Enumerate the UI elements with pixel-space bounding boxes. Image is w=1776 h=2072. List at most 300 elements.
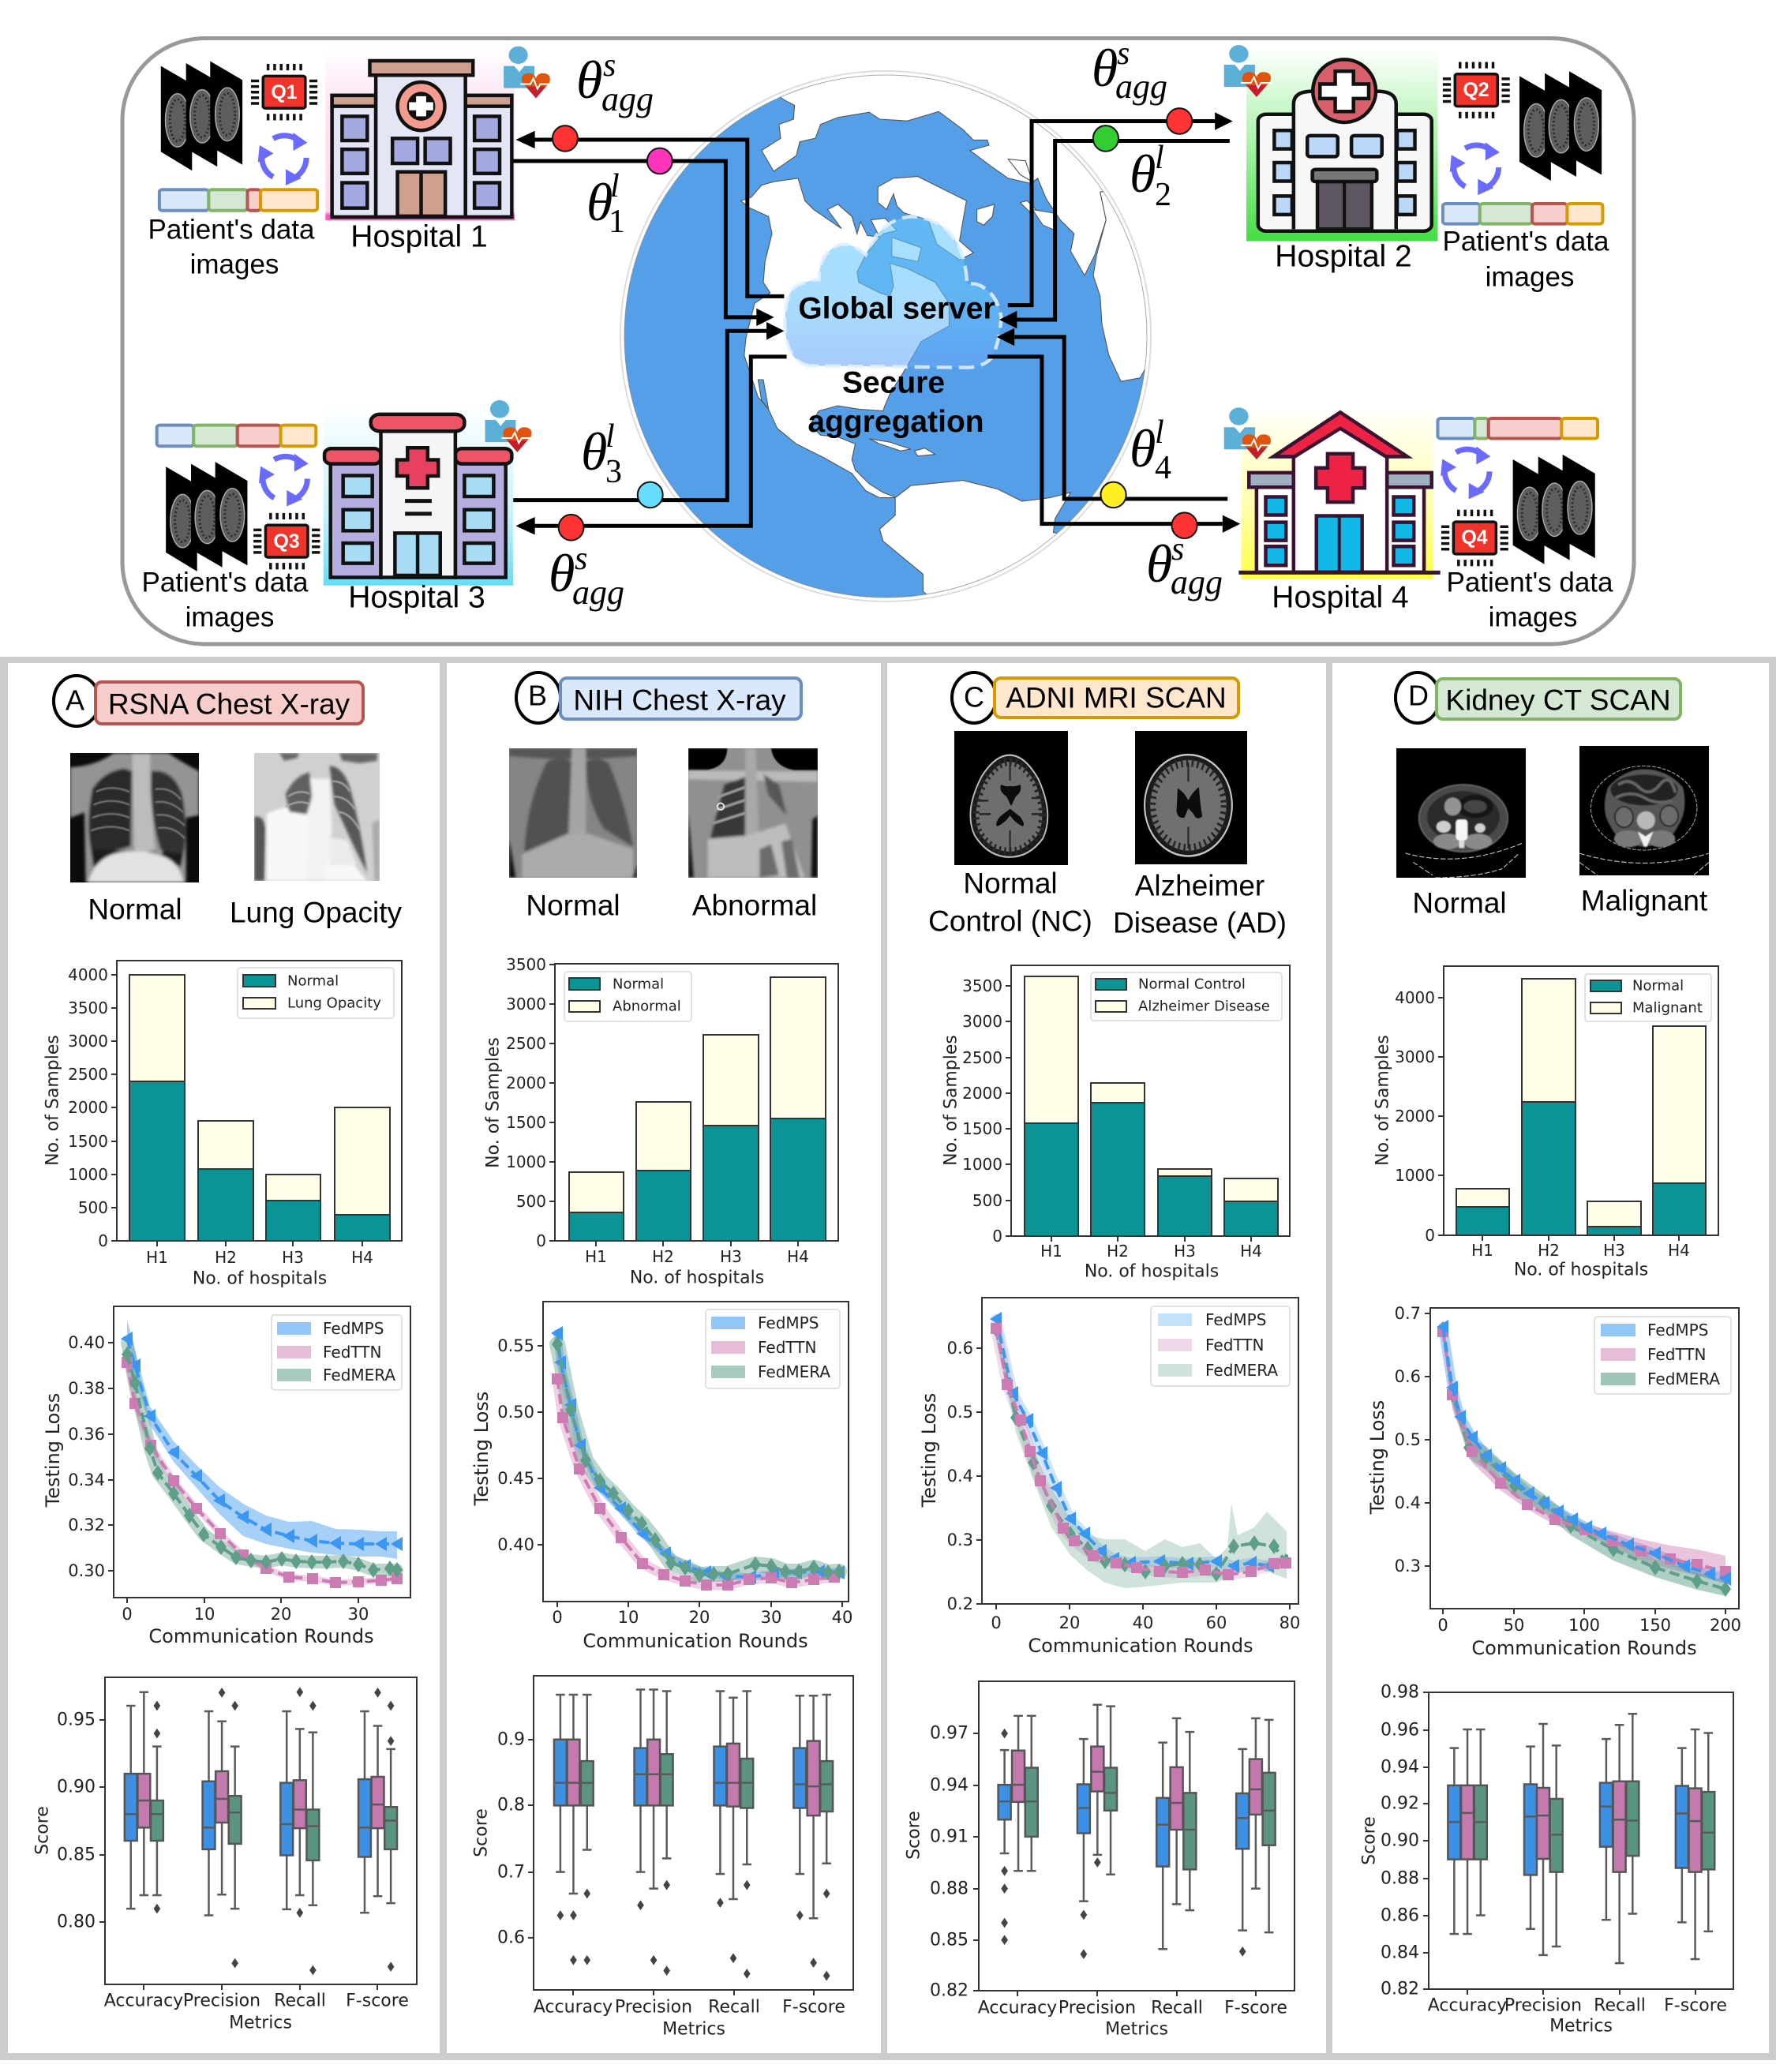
theta symbols: θ [1146,534,1172,594]
label: Normal Control (NC) [928,867,1092,938]
box plot C: 0.91 [930,1827,969,1847]
icon: brain scan stack Q2 [1519,71,1602,181]
patient data captions: Patient's data [142,567,309,598]
line chart C: 0.5 [947,1403,973,1422]
bar chart B: No. of Samples [483,1037,504,1168]
line chart C: 40 [1133,1613,1153,1632]
icon: sync arrows Q3 [252,454,313,511]
icon: brain scan stack Q1 [161,61,242,170]
legend: FedTTN [323,1343,381,1362]
line chart D: 0.6 [1395,1367,1421,1386]
box plot D: Score [1359,1816,1380,1865]
icon: quantum chip Q4 [1441,510,1508,566]
bar chart C: 1000 [962,1155,1002,1174]
legend: FedMPS [1205,1310,1266,1329]
arrow: local model from hospital 1 [513,148,774,326]
line chart D: Testing Loss [1366,1400,1388,1515]
theta symbols: θ [586,172,613,232]
hospital labels: Hospital 1 [350,219,488,254]
label: Alzheimer Disease (AD): Alzheimer [1135,870,1265,901]
box plot C: 0.85 [930,1931,969,1950]
line chart A: 0 [122,1605,133,1624]
theta symbols: s [1171,531,1184,568]
bar chart D: H2 [1538,1241,1560,1260]
label: Normal: Normal [1412,887,1507,919]
patient data captions: Patient's data [1446,567,1613,598]
image: normal chest X-ray [70,753,199,882]
box plot A: Recall [274,1991,326,2011]
legend: FedMPS [323,1319,384,1338]
panel A: RSNA chest X-ray [33,676,417,2033]
bar chart C: H1 [1040,1242,1062,1261]
box plot B: Score [472,1808,491,1857]
legend [238,968,394,1018]
line chart D: 0 [1437,1616,1448,1635]
patient data captions [142,215,1613,633]
line chart B: 0.50 [497,1403,534,1422]
box plot B: 0.7 [497,1863,525,1882]
line chart C: 60 [1206,1613,1227,1632]
heading C: ADNI MRI SCAN [1006,682,1227,714]
bar chart A: 4000 [68,965,108,984]
line chart D: 0.4 [1395,1493,1421,1512]
box plot A: Accuracy [104,1991,183,2011]
data bar Q3 [157,425,316,446]
line chart B: 0.45 [497,1469,534,1488]
line chart C: 0.6 [947,1339,973,1358]
bar chart B: H4 [787,1247,809,1266]
icon: doctor and heart, hospital 4 [1224,407,1272,459]
bar chart A: 2500 [68,1065,108,1084]
heading C: C [964,680,984,714]
line chart B: 0.40 [497,1535,534,1554]
cloud: global server [785,216,1001,368]
arrow: local model from hospital 2 [999,126,1230,328]
legend: FedTTN [1647,1345,1706,1364]
heading A: A [66,684,84,717]
bar chart D: 2000 [1395,1107,1435,1126]
box plot D: F-score [1664,1995,1727,2016]
image: Alzheimer disease brain MRI [1135,731,1247,864]
line chart D: 150 [1639,1616,1671,1635]
chip labels: Q4 [1461,526,1488,549]
bar chart A: No. of hospitals [193,1269,327,1288]
bar chart A: H2 [215,1248,237,1267]
heading B [516,673,801,723]
legend: Normal [287,972,339,990]
bar chart C: 0 [992,1227,1002,1246]
line chart C: 20 [1059,1613,1080,1632]
theta symbols: θ [576,50,602,110]
legend [1594,1317,1731,1394]
box plot A: Metrics [229,2013,292,2033]
line chart B: 40 [832,1608,852,1627]
label: secure aggregation: Secure [842,366,945,399]
hospital labels: Hospital 4 [1272,581,1409,614]
theta symbols: agg [1115,67,1167,106]
panel B: NIH chest X-ray [470,673,853,2040]
label: global server: Global server [798,292,995,325]
box plot B: 0.9 [497,1730,525,1749]
box plot D: 0.84 [1381,1943,1419,1962]
icon: quantum chip Q3 [253,513,320,569]
hospital 2 icon [1246,48,1437,242]
bar chart B: 1000 [506,1152,546,1171]
bar chart A: H3 [282,1248,304,1267]
legend [1585,974,1711,1021]
theta symbols: s [1117,36,1130,72]
box plot A: F-score [346,1991,409,2011]
arrow: aggregated model to hospital 3 [515,357,787,541]
box plot C: Precision [1058,1999,1136,2018]
bar chart B: H3 [720,1247,742,1266]
bar chart B: 1500 [506,1113,546,1132]
line chart D: 50 [1504,1616,1524,1635]
top panel: federated learning overview [122,36,1634,644]
bar chart D: No. of hospitals [1514,1260,1648,1280]
line chart D: 0.7 [1395,1304,1421,1323]
box plot C: Score [905,1811,924,1860]
bar chart C: H3 [1174,1242,1196,1261]
line chart C: 0.2 [947,1594,973,1613]
box plot C: Accuracy [978,1999,1057,2018]
label: Normal: Normal [526,889,620,922]
icon: doctor and heart, hospital 3 [485,400,533,452]
box plot D: 0.82 [1381,1980,1419,1999]
box plot D: 0.92 [1381,1793,1419,1814]
box plot D: 0.94 [1381,1757,1419,1778]
bar chart D: H3 [1603,1241,1625,1260]
line chart B: 20 [689,1608,710,1627]
line chart C: 80 [1280,1613,1300,1632]
box plot D: 0.96 [1381,1721,1419,1740]
hospital labels [348,219,1412,614]
bar chart C: 1500 [962,1119,1002,1138]
theta symbols: s [575,541,587,577]
hospital labels: Hospital 3 [348,581,485,614]
bar chart A: 3500 [68,999,108,1017]
line chart C: 0 [991,1613,1002,1632]
theta symbols: 3 [605,454,622,490]
line chart D: Communication Rounds [1471,1637,1697,1659]
icon: doctor and heart, hospital 2 [1224,45,1272,97]
label: Normal Control (NC): Normal [963,867,1058,900]
icon: sync arrows Q1 [251,133,312,190]
hospital 1 icon [325,48,515,220]
bar chart B: 2500 [506,1034,546,1053]
bar chart A: 500 [78,1198,108,1217]
line chart D: 0.5 [1395,1430,1421,1449]
bar chart A: No. of Samples [43,1035,63,1166]
theta symbols: l [605,418,615,455]
arrow: aggregated model to hospital 2 [1008,108,1233,305]
line chart A: 20 [271,1605,291,1624]
bar chart C [941,965,1290,1282]
data bar Q4 [1437,418,1598,439]
line chart A: 0.40 [68,1333,105,1352]
theta symbols: θ [549,543,575,603]
bar chart B: 3500 [506,955,546,974]
box plot C: 0.94 [930,1776,969,1795]
legend: Normal Control [1138,976,1246,993]
bar chart D: No. of Samples [1373,1035,1392,1166]
frame around dataset panels [0,657,1776,2060]
theta symbols: agg [572,573,624,612]
bar chart B: H1 [585,1247,607,1266]
bar chart B: 2000 [506,1073,546,1092]
chip labels: Q2 [1463,79,1489,101]
box plot C: 0.97 [930,1724,969,1743]
bar chart A: 3000 [68,1032,108,1051]
line chart B: Communication Rounds [583,1630,808,1652]
label: Malignant: Malignant [1581,884,1708,917]
line chart A [42,1306,410,1647]
label: Lung Opacity: Lung Opacity [230,897,403,928]
heading B: NIH Chest X-ray [573,684,786,717]
box plot B: 0.6 [497,1928,525,1948]
globe [620,70,1152,602]
box plot D: Accuracy [1428,1995,1507,2016]
line chart D: 200 [1710,1616,1741,1635]
data bar Q1 [159,189,317,211]
box plot D: Recall [1594,1995,1646,2016]
legend: FedMERA [758,1362,830,1381]
bar chart B: 500 [516,1192,546,1211]
hospital 3 icon [324,407,513,586]
line chart D: 100 [1568,1616,1600,1635]
image: normal control brain MRI [954,731,1068,865]
theta symbols: agg [601,80,654,118]
legend: Abnormal [613,998,681,1015]
patient data captions: images [1486,262,1574,292]
theta symbols: s [603,47,616,84]
left half drawing: hospital 1 and hospital 3 [157,47,787,586]
bar chart C: No. of hospitals [1085,1261,1219,1282]
box plot D: Metrics [1549,2016,1613,2036]
bar chart B: 3000 [506,995,546,1014]
icon: quantum chip Q1 [251,64,317,120]
legend [1151,1306,1290,1386]
box plot C: Recall [1151,1999,1203,2018]
line chart B: Testing Loss [470,1392,493,1506]
box plot B: Accuracy [534,1997,613,2018]
legend: Alzheimer Disease [1138,998,1270,1015]
bar chart D: 3000 [1395,1047,1435,1066]
theta symbols: θ [1092,38,1118,98]
bar chart C: H2 [1107,1242,1129,1261]
image: lung opacity chest X-ray [254,753,380,881]
bar chart B [483,955,838,1288]
heading B: B [528,679,547,712]
heading A [54,676,363,726]
line chart D [1366,1304,1741,1659]
bar chart C: 3000 [962,1012,1002,1031]
box plot A: 0.85 [57,1845,96,1864]
bar chart D: 0 [1425,1226,1435,1245]
bar chart D: 4000 [1395,988,1435,1007]
bar chart A: H1 [146,1248,168,1267]
legend: Normal [613,976,664,993]
image: normal chest X-ray [509,748,637,878]
legend: Malignant [1632,999,1703,1017]
arrow: aggregated model to hospital 1 [515,126,784,296]
patient data captions: images [190,249,279,279]
box plot D: Precision [1504,1995,1582,2016]
legend [272,1315,402,1390]
bar chart C: No. of Samples [941,1035,961,1166]
hospital labels: Hospital 2 [1275,240,1412,273]
arrow: aggregated model to hospital 4 [987,357,1240,538]
line chart B: 0.55 [497,1336,534,1355]
image: abnormal chest X-ray [688,748,818,878]
box plot B: Metrics [662,2019,725,2040]
bar chart A: 0 [98,1231,108,1250]
theta symbols: agg [1171,563,1223,601]
box plot B: Precision [615,1997,692,2018]
bar chart C: 2000 [962,1084,1002,1103]
line chart C: Communication Rounds [1028,1635,1253,1657]
box plot C: Metrics [1105,2019,1168,2040]
chip labels: Q1 [271,81,298,103]
heading D: D [1408,679,1429,712]
theta symbols: θ [1130,418,1156,478]
icon: quantum chip Q2 [1443,62,1510,118]
box plot A: Score [33,1806,52,1855]
bar chart A: 2000 [68,1098,108,1117]
icon: brain scan stack Q4 [1513,455,1595,564]
legend: FedMERA [1647,1369,1720,1388]
heading A: RSNA Chest X-ray [108,688,350,720]
panel D: kidney CT scan [1359,673,1741,2036]
line chart A: 0.38 [68,1379,105,1398]
legend [706,1310,840,1388]
legend [1091,972,1282,1021]
bar chart B: 0 [536,1231,546,1250]
arrow: local model from hospital 4 [997,328,1227,508]
bar chart A: 1000 [68,1165,108,1184]
box plot B: Recall [708,1997,760,2018]
bar chart D [1373,966,1718,1280]
theta symbols: l [1155,140,1164,176]
box plot D: 0.98 [1381,1683,1419,1702]
label: Abnormal: Abnormal [692,889,817,922]
line chart A: 0.32 [68,1516,105,1534]
legend: FedTTN [758,1338,816,1357]
image: malignant kidney CT [1579,746,1709,875]
icon: doctor and heart, hospital 1 [504,47,552,98]
line chart B: 30 [761,1608,781,1627]
arrow: local model from hospital 3 [513,322,784,508]
line chart A: Testing Loss [42,1393,64,1508]
patient data captions: images [1489,601,1577,633]
chip labels: Q3 [273,530,300,553]
bar chart C: 500 [972,1191,1002,1210]
bar chart C: H4 [1240,1242,1262,1261]
legend: FedMPS [758,1313,819,1332]
box plot C: F-score [1224,1999,1287,2018]
box plot A: 0.90 [57,1778,96,1797]
heading D [1396,673,1680,723]
box plot B: 0.8 [497,1795,525,1815]
chip labels [271,79,1489,553]
legend: FedMPS [1647,1321,1708,1339]
bar chart B: H2 [652,1247,674,1266]
heading C [952,673,1238,723]
label: Normal: Normal [88,894,182,925]
theta symbols: l [1155,414,1164,451]
bar chart D: H4 [1668,1241,1690,1260]
line chart C [918,1298,1300,1657]
bar chart D: 1000 [1395,1166,1435,1185]
box plot A: 0.95 [57,1710,96,1730]
box plot A: Precision [183,1991,260,2011]
image: normal kidney CT [1396,748,1526,878]
theta symbols: 1 [609,204,625,240]
theta symbols [549,36,1223,612]
bar chart C: 3500 [962,976,1002,995]
theta symbols: 4 [1155,450,1171,486]
bar chart C: 2500 [962,1048,1002,1067]
line chart B: 10 [618,1608,639,1627]
legend: Normal [1632,977,1684,995]
theta symbols: l [610,168,620,204]
heading D: Kidney CT SCAN [1445,684,1671,717]
bar chart D: H1 [1471,1241,1493,1260]
bar chart A: 1500 [68,1132,108,1151]
icon: sync arrows Q2 [1443,142,1504,200]
line chart C: 0.3 [947,1531,973,1549]
label: secure aggregation: aggregation [807,404,984,439]
label: Normal Control (NC): Control (NC) [928,905,1092,938]
line chart A: 0.36 [68,1425,105,1444]
box plot B [472,1676,853,2040]
line chart C: 0.4 [947,1467,973,1486]
panel C: ADNI MRI scan [905,673,1300,2040]
right half drawing: hospital 2 and hospital 4 [987,45,1602,579]
bar chart A: H4 [351,1248,373,1267]
box plot D: 0.90 [1381,1831,1419,1850]
line chart A: Communication Rounds [148,1625,374,1647]
theta symbols: θ [581,422,607,481]
patient data captions: Patient's data [148,215,315,245]
theta symbols: 2 [1155,177,1171,213]
line chart B: 0 [552,1608,563,1627]
theta symbols: θ [1130,144,1156,204]
icon: brain scan stack Q3 [166,462,247,571]
bar chart B: No. of hospitals [630,1268,764,1288]
patient data captions: images [185,601,274,633]
box plot A: 0.80 [57,1912,96,1932]
label: Alzheimer Disease (AD) [1113,870,1287,939]
legend: FedMERA [1205,1361,1278,1380]
legend [564,972,691,1021]
icon: sync arrows Q4 [1433,446,1495,504]
line chart D: 0.3 [1395,1557,1421,1576]
box plot A [33,1677,417,2033]
legend: FedTTN [1205,1336,1264,1354]
legend: Lung Opacity [287,995,381,1012]
bar chart A [43,961,402,1288]
line chart A: 10 [194,1605,215,1624]
box plot D: 0.86 [1381,1905,1419,1926]
hospital 4 icon [1238,407,1441,579]
line chart A: 0.34 [68,1471,105,1489]
patient data captions: Patient's data [1443,226,1609,257]
box plot B: F-score [782,1997,845,2018]
box plot C: 0.88 [930,1879,969,1899]
line chart B [470,1302,852,1652]
legend: FedMERA [323,1366,395,1384]
